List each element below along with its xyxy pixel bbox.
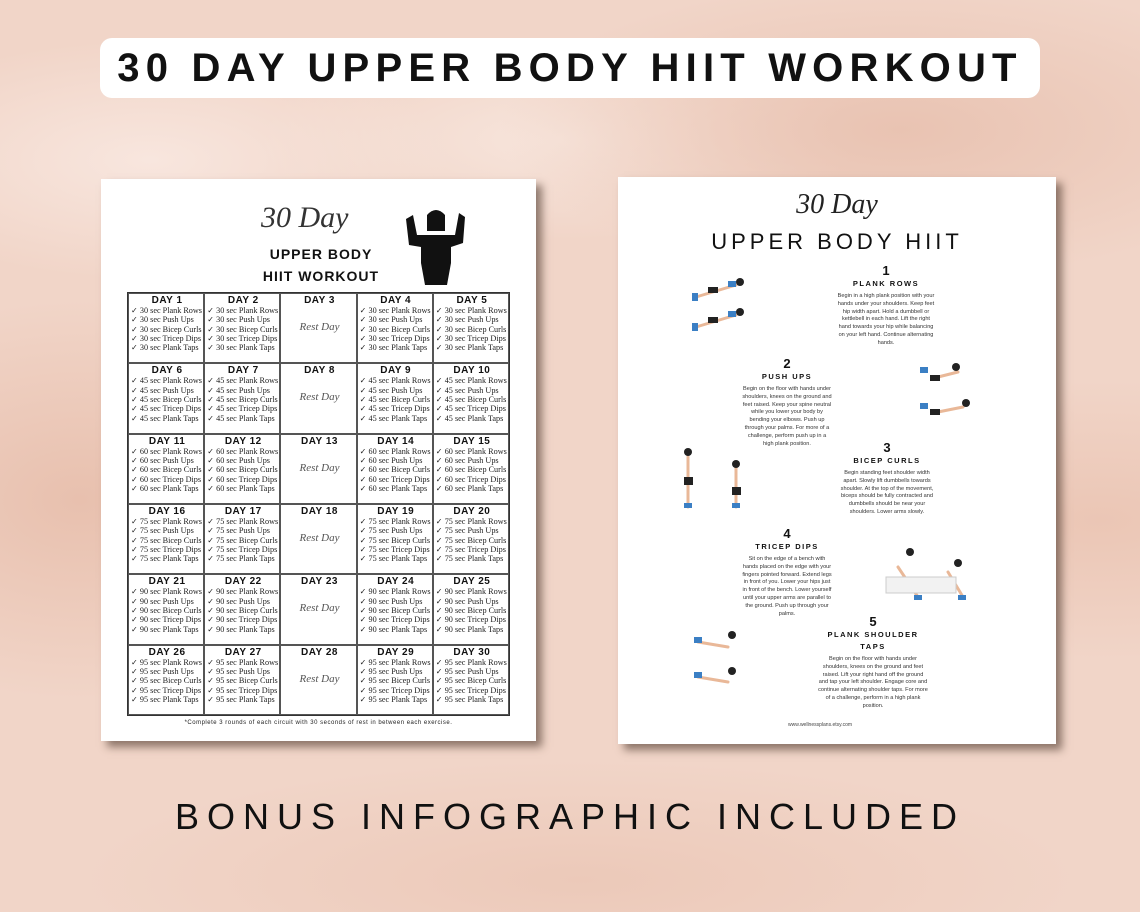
calendar grid: ✓ 95 sec Plank Taps — [360, 695, 427, 704]
calendar grid: ✓ 30 sec Push Ups — [131, 315, 194, 324]
calendar grid: ✓ 30 sec Bicep Curls — [131, 325, 202, 334]
calendar grid: ✓ 75 sec Plank Rows — [436, 517, 507, 526]
calendar grid: ✓ 75 sec Tricep Dips — [436, 545, 506, 554]
calendar grid: ✓ 60 sec Plank Taps — [436, 484, 503, 493]
calendar grid: DAY 6 — [152, 365, 183, 376]
exercise 3: Begin standing feet shoulder width apart. Slowly lift dumbbells towards shoulder. At the top of the movement, biceps should be fully contracted and dumbbells should be near your shoulders. Lower arms slowly. — [841, 470, 933, 515]
exercise 1: Begin in a high plank position with your hands under your shoulders. Keep feet hip width apart. Hold a dumbbell or kettlebell in each hand. Lift the right hand towards your hip while balancing on your left hand. Continue alternating hands. — [838, 293, 934, 346]
calendar grid: ✓ 95 sec Plank Rows — [207, 658, 278, 667]
calendar grid: DAY 4 — [380, 295, 411, 306]
exercise 4: Sit on the edge of a bench with hands placed on the edge with your fingers pointed forward. Extend legs in front of you. Lower your hips just in front of the bench. Lower yourself until your upper arms are parallel to the ground. Push up through your palms. — [742, 556, 832, 617]
calendar grid: DAY 24 — [377, 576, 414, 587]
calendar grid: ✓ 30 sec Tricep Dips — [360, 334, 430, 343]
calendar grid: ✓ 45 sec Plank Rows — [436, 376, 507, 385]
calendar grid: ✓ 30 sec Bicep Curls — [360, 325, 430, 334]
calendar grid: ✓ 75 sec Bicep Curls — [131, 536, 202, 545]
calendar grid: ✓ 30 sec Plank Taps — [207, 343, 275, 352]
calendar grid: ✓ 30 sec Push Ups — [207, 315, 270, 324]
calendar grid: ✓ 60 sec Plank Rows — [436, 447, 507, 456]
calendar grid: ✓ 95 sec Plank Taps — [131, 695, 199, 704]
calendar grid: ✓ 60 sec Tricep Dips — [360, 475, 430, 484]
calendar grid: ✓ 75 sec Push Ups — [131, 526, 194, 535]
calendar grid: ✓ 45 sec Plank Rows — [360, 376, 431, 385]
calendar grid: Rest Day — [299, 391, 340, 403]
calendar grid: DAY 29 — [377, 647, 414, 658]
calendar grid: ✓ 60 sec Bicep Curls — [360, 465, 430, 474]
calendar grid: ✓ 90 sec Plank Taps — [360, 625, 427, 634]
calendar grid: ✓ 45 sec Tricep Dips — [131, 404, 201, 413]
exercise 4: TRICEP DIPS — [755, 542, 819, 551]
calendar grid: ✓ 45 sec Tricep Dips — [207, 404, 277, 413]
calendar grid: DAY 15 — [453, 436, 490, 447]
exercise 1 — [838, 263, 934, 346]
calendar grid: ✓ 45 sec Bicep Curls — [207, 395, 278, 404]
calendar grid: DAY 23 — [301, 576, 338, 587]
calendar grid: ✓ 90 sec Plank Taps — [207, 625, 275, 634]
calendar grid: DAY 7 — [228, 365, 259, 376]
calendar grid: ✓ 60 sec Plank Rows — [131, 447, 202, 456]
heading: UPPER BODY HIIT — [711, 229, 963, 254]
exercise 1: 1 — [882, 263, 890, 278]
calendar grid: ✓ 90 sec Plank Rows — [131, 587, 202, 596]
calendar grid: DAY 27 — [225, 647, 262, 658]
calendar grid: ✓ 90 sec Tricep Dips — [207, 615, 277, 624]
calendar grid: ✓ 60 sec Push Ups — [436, 456, 499, 465]
calendar grid — [127, 292, 510, 716]
calendar grid: DAY 28 — [301, 647, 338, 658]
calendar grid: ✓ 30 sec Plank Taps — [360, 343, 427, 352]
calendar grid: DAY 13 — [301, 436, 338, 447]
calendar grid: ✓ 60 sec Plank Taps — [360, 484, 427, 493]
calendar grid: ✓ 45 sec Bicep Curls — [436, 395, 506, 404]
calendar grid: ✓ 95 sec Bicep Curls — [207, 676, 278, 685]
calendar grid: ✓ 45 sec Plank Taps — [207, 414, 275, 423]
calendar grid: ✓ 45 sec Push Ups — [436, 386, 499, 395]
calendar grid: DAY 16 — [149, 506, 186, 517]
calendar grid: ✓ 45 sec Tricep Dips — [436, 404, 506, 413]
calendar grid: ✓ 90 sec Tricep Dips — [131, 615, 201, 624]
panel: calendar page — [101, 179, 536, 741]
icon: flexing silhouette — [406, 210, 465, 285]
calendar grid: ✓ 30 sec Plank Rows — [360, 306, 431, 315]
calendar grid: ✓ 95 sec Bicep Curls — [360, 676, 430, 685]
url: www.wellnessplans.etsy.com — [788, 722, 852, 728]
calendar grid: ✓ 95 sec Plank Rows — [436, 658, 507, 667]
calendar grid: ✓ 90 sec Plank Taps — [436, 625, 503, 634]
exercise 3 — [840, 440, 933, 515]
calendar grid: ✓ 60 sec Plank Rows — [360, 447, 431, 456]
calendar grid: ✓ 90 sec Tricep Dips — [360, 615, 430, 624]
calendar grid: ✓ 45 sec Push Ups — [360, 386, 422, 395]
calendar grid: ✓ 60 sec Push Ups — [131, 456, 194, 465]
calendar grid: ✓ 30 sec Push Ups — [436, 315, 499, 324]
calendar grid: ✓ 90 sec Push Ups — [360, 597, 422, 606]
calendar grid: ✓ 95 sec Plank Rows — [131, 658, 202, 667]
calendar grid: DAY 5 — [456, 295, 487, 306]
calendar grid: ✓ 45 sec Push Ups — [131, 386, 194, 395]
calendar grid: ✓ 60 sec Push Ups — [207, 456, 270, 465]
calendar grid: ✓ 95 sec Plank Taps — [207, 695, 275, 704]
calendar grid: ✓ 60 sec Plank Taps — [131, 484, 199, 493]
calendar grid: ✓ 75 sec Plank Rows — [131, 517, 202, 526]
calendar grid: ✓ 45 sec Plank Taps — [436, 414, 503, 423]
exercise 4: 4 — [783, 526, 791, 541]
exercise 5: PLANK SHOULDER TAPS — [827, 630, 918, 651]
calendar grid: ✓ 90 sec Bicep Curls — [436, 606, 506, 615]
calendar grid: DAY 25 — [453, 576, 490, 587]
calendar grid: ✓ 30 sec Tricep Dips — [207, 334, 277, 343]
calendar grid: Rest Day — [299, 602, 340, 614]
calendar grid: ✓ 90 sec Bicep Curls — [360, 606, 430, 615]
calendar grid: ✓ 95 sec Plank Taps — [436, 695, 503, 704]
calendar grid: ✓ 30 sec Plank Taps — [436, 343, 503, 352]
calendar grid: ✓ 30 sec Push Ups — [360, 315, 422, 324]
calendar grid: ✓ 30 sec Tricep Dips — [436, 334, 506, 343]
calendar grid: DAY 10 — [453, 365, 490, 376]
calendar grid: ✓ 30 sec Bicep Curls — [436, 325, 506, 334]
heading: HIIT WORKOUT — [263, 268, 379, 284]
calendar grid: ✓ 60 sec Bicep Curls — [131, 465, 202, 474]
calendar grid: ✓ 60 sec Tricep Dips — [131, 475, 201, 484]
calendar grid: DAY 19 — [377, 506, 414, 517]
calendar grid: ✓ 45 sec Bicep Curls — [360, 395, 430, 404]
calendar grid: ✓ 95 sec Push Ups — [131, 667, 194, 676]
calendar grid: ✓ 60 sec Push Ups — [360, 456, 422, 465]
calendar grid: ✓ 60 sec Tricep Dips — [436, 475, 506, 484]
calendar grid: ✓ 75 sec Plank Taps — [360, 554, 427, 563]
calendar grid: DAY 30 — [453, 647, 490, 658]
exercise 3: BICEP CURLS — [853, 456, 921, 465]
calendar grid: ✓ 45 sec Bicep Curls — [131, 395, 202, 404]
calendar grid: ✓ 45 sec Plank Taps — [131, 414, 199, 423]
calendar grid: ✓ 95 sec Bicep Curls — [436, 676, 506, 685]
calendar grid: DAY 12 — [225, 436, 262, 447]
calendar grid: ✓ 90 sec Plank Rows — [360, 587, 431, 596]
calendar grid: ✓ 75 sec Push Ups — [360, 526, 422, 535]
heading: UPPER BODY — [270, 246, 372, 262]
calendar grid: ✓ 95 sec Bicep Curls — [131, 676, 202, 685]
calendar grid: ✓ 30 sec Plank Rows — [131, 306, 202, 315]
calendar grid: ✓ 95 sec Tricep Dips — [207, 686, 277, 695]
exercise 5 — [818, 614, 928, 709]
calendar grid: ✓ 95 sec Plank Rows — [360, 658, 431, 667]
calendar grid: DAY 22 — [225, 576, 262, 587]
calendar grid: DAY 1 — [152, 295, 183, 306]
calendar grid: ✓ 75 sec Push Ups — [207, 526, 270, 535]
calendar grid: ✓ 75 sec Bicep Curls — [436, 536, 506, 545]
calendar grid: ✓ 75 sec Plank Taps — [131, 554, 199, 563]
footnote: *Complete 3 rounds of each circuit with 30 seconds of rest in between each exercise. — [185, 720, 452, 726]
calendar grid: DAY 21 — [149, 576, 186, 587]
calendar grid: ✓ 60 sec Bicep Curls — [436, 465, 506, 474]
calendar grid: ✓ 90 sec Tricep Dips — [436, 615, 506, 624]
script heading: 30 Day — [796, 189, 878, 220]
calendar grid: ✓ 75 sec Plank Rows — [360, 517, 431, 526]
exercise 4 — [742, 526, 832, 617]
calendar grid: ✓ 75 sec Tricep Dips — [360, 545, 430, 554]
calendar grid: ✓ 60 sec Bicep Curls — [207, 465, 278, 474]
calendar grid: Rest Day — [299, 321, 340, 333]
exercise 5: Begin on the floor with hands under shoulders, knees on the ground and feet raised. Lift your right hand off the ground and tap your left shoulder. Engage core and continue alternating shoulder taps. For more of a challenge, perform in a high plank position. — [818, 656, 928, 709]
figures — [684, 278, 970, 684]
calendar grid: ✓ 45 sec Plank Rows — [207, 376, 278, 385]
exercise 3: 3 — [883, 440, 891, 455]
calendar grid: ✓ 90 sec Push Ups — [207, 597, 270, 606]
calendar grid: ✓ 30 sec Plank Taps — [131, 343, 199, 352]
exercise 5: 5 — [869, 614, 877, 629]
calendar grid: ✓ 75 sec Push Ups — [436, 526, 499, 535]
calendar grid: DAY 18 — [301, 506, 338, 517]
calendar grid: ✓ 30 sec Tricep Dips — [131, 334, 201, 343]
exercise 2: 2 — [783, 356, 791, 371]
calendar grid: ✓ 45 sec Plank Rows — [131, 376, 202, 385]
calendar grid: ✓ 90 sec Bicep Curls — [131, 606, 202, 615]
calendar grid: ✓ 90 sec Push Ups — [131, 597, 194, 606]
calendar grid: Rest Day — [299, 532, 340, 544]
calendar grid: ✓ 90 sec Plank Rows — [207, 587, 278, 596]
title banner: 30 DAY UPPER BODY HIIT WORKOUT — [117, 46, 1023, 90]
exercise 2: PUSH UPS — [762, 372, 812, 381]
exercise 2: Begin on the floor with hands under shoulders, knees on the ground and feet raised. Keep your spine neutral while you lower your body by bending your elbows. Push up through your palms. For more of a challenge, perform push up in a high plank position. — [742, 386, 832, 447]
calendar grid: DAY 3 — [304, 295, 335, 306]
calendar grid: DAY 17 — [225, 506, 262, 517]
calendar grid: ✓ 95 sec Tricep Dips — [360, 686, 430, 695]
calendar grid: ✓ 75 sec Tricep Dips — [207, 545, 277, 554]
calendar grid: ✓ 60 sec Plank Taps — [207, 484, 275, 493]
calendar grid: ✓ 45 sec Push Ups — [207, 386, 270, 395]
calendar grid: ✓ 45 sec Tricep Dips — [360, 404, 430, 413]
calendar grid: ✓ 95 sec Push Ups — [207, 667, 270, 676]
calendar grid: Rest Day — [299, 673, 340, 685]
calendar grid: ✓ 90 sec Plank Taps — [131, 625, 199, 634]
calendar grid: ✓ 90 sec Bicep Curls — [207, 606, 278, 615]
calendar grid: ✓ 75 sec Bicep Curls — [207, 536, 278, 545]
calendar grid: ✓ 95 sec Push Ups — [436, 667, 499, 676]
panel: exercise infographic page — [618, 177, 1056, 744]
calendar grid: DAY 8 — [304, 365, 335, 376]
calendar grid: ✓ 75 sec Bicep Curls — [360, 536, 430, 545]
calendar grid: ✓ 75 sec Tricep Dips — [131, 545, 201, 554]
bottom caption: BONUS INFOGRAPHIC INCLUDED — [175, 796, 965, 837]
script heading: 30 Day — [261, 201, 348, 234]
calendar grid: DAY 11 — [149, 436, 185, 447]
calendar grid: Rest Day — [299, 462, 340, 474]
calendar grid: ✓ 90 sec Plank Rows — [436, 587, 507, 596]
calendar grid: ✓ 60 sec Plank Rows — [207, 447, 278, 456]
calendar grid: ✓ 30 sec Plank Rows — [436, 306, 507, 315]
calendar grid: ✓ 75 sec Plank Taps — [207, 554, 275, 563]
calendar grid: DAY 14 — [377, 436, 414, 447]
calendar grid: ✓ 95 sec Tricep Dips — [436, 686, 506, 695]
exercise 1: PLANK ROWS — [853, 279, 919, 288]
calendar grid: DAY 9 — [380, 365, 411, 376]
calendar grid: ✓ 30 sec Plank Rows — [207, 306, 278, 315]
calendar grid: ✓ 95 sec Tricep Dips — [131, 686, 201, 695]
calendar grid: ✓ 90 sec Push Ups — [436, 597, 499, 606]
calendar grid: DAY 20 — [453, 506, 490, 517]
exercise 2 — [742, 356, 832, 447]
heading — [263, 246, 379, 284]
calendar grid: DAY 26 — [149, 647, 186, 658]
calendar grid: ✓ 75 sec Plank Taps — [436, 554, 503, 563]
calendar grid: ✓ 60 sec Tricep Dips — [207, 475, 277, 484]
calendar grid: ✓ 75 sec Plank Rows — [207, 517, 278, 526]
calendar grid: DAY 2 — [228, 295, 259, 306]
calendar grid: ✓ 45 sec Plank Taps — [360, 414, 427, 423]
calendar grid: ✓ 95 sec Push Ups — [360, 667, 422, 676]
calendar grid: ✓ 30 sec Bicep Curls — [207, 325, 278, 334]
